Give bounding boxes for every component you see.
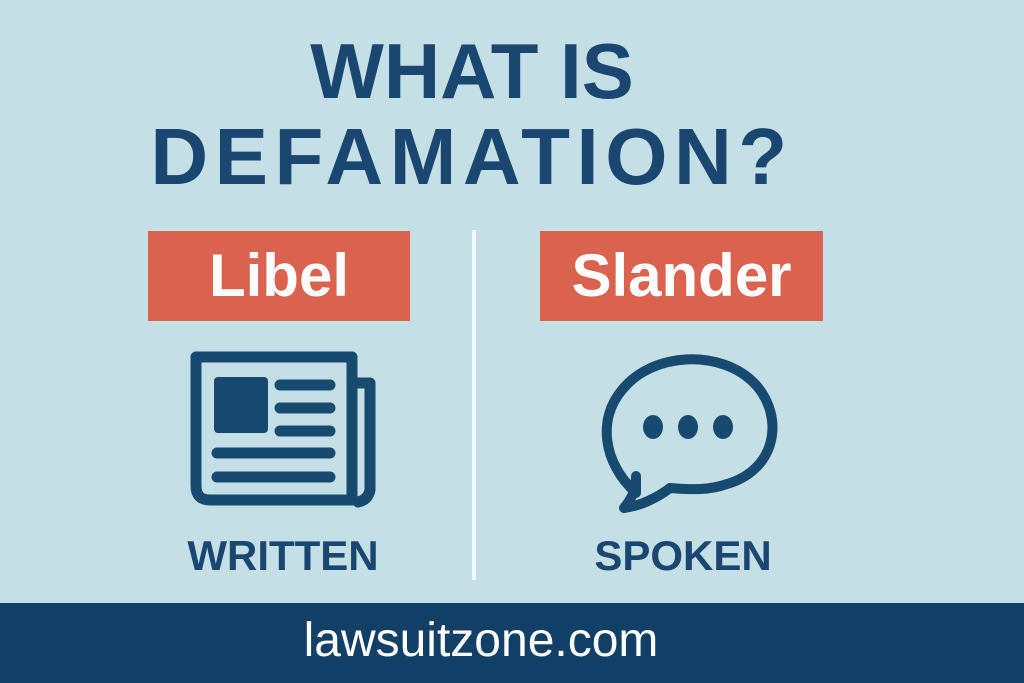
label: Libel xyxy=(148,231,410,321)
caption: spoken: SPOKEN xyxy=(594,532,772,579)
label: Libel: Libel xyxy=(209,242,349,309)
label: Slander xyxy=(540,231,823,321)
title: WHAT IS xyxy=(310,27,634,115)
title xyxy=(150,27,794,201)
divider xyxy=(472,230,476,580)
title: DEFAMATION? xyxy=(150,112,794,201)
footer: lawsuitzone.com xyxy=(304,614,658,667)
caption: written: WRITTEN xyxy=(187,532,379,579)
label: Slander: Slander xyxy=(571,242,792,309)
footer xyxy=(0,603,1024,683)
